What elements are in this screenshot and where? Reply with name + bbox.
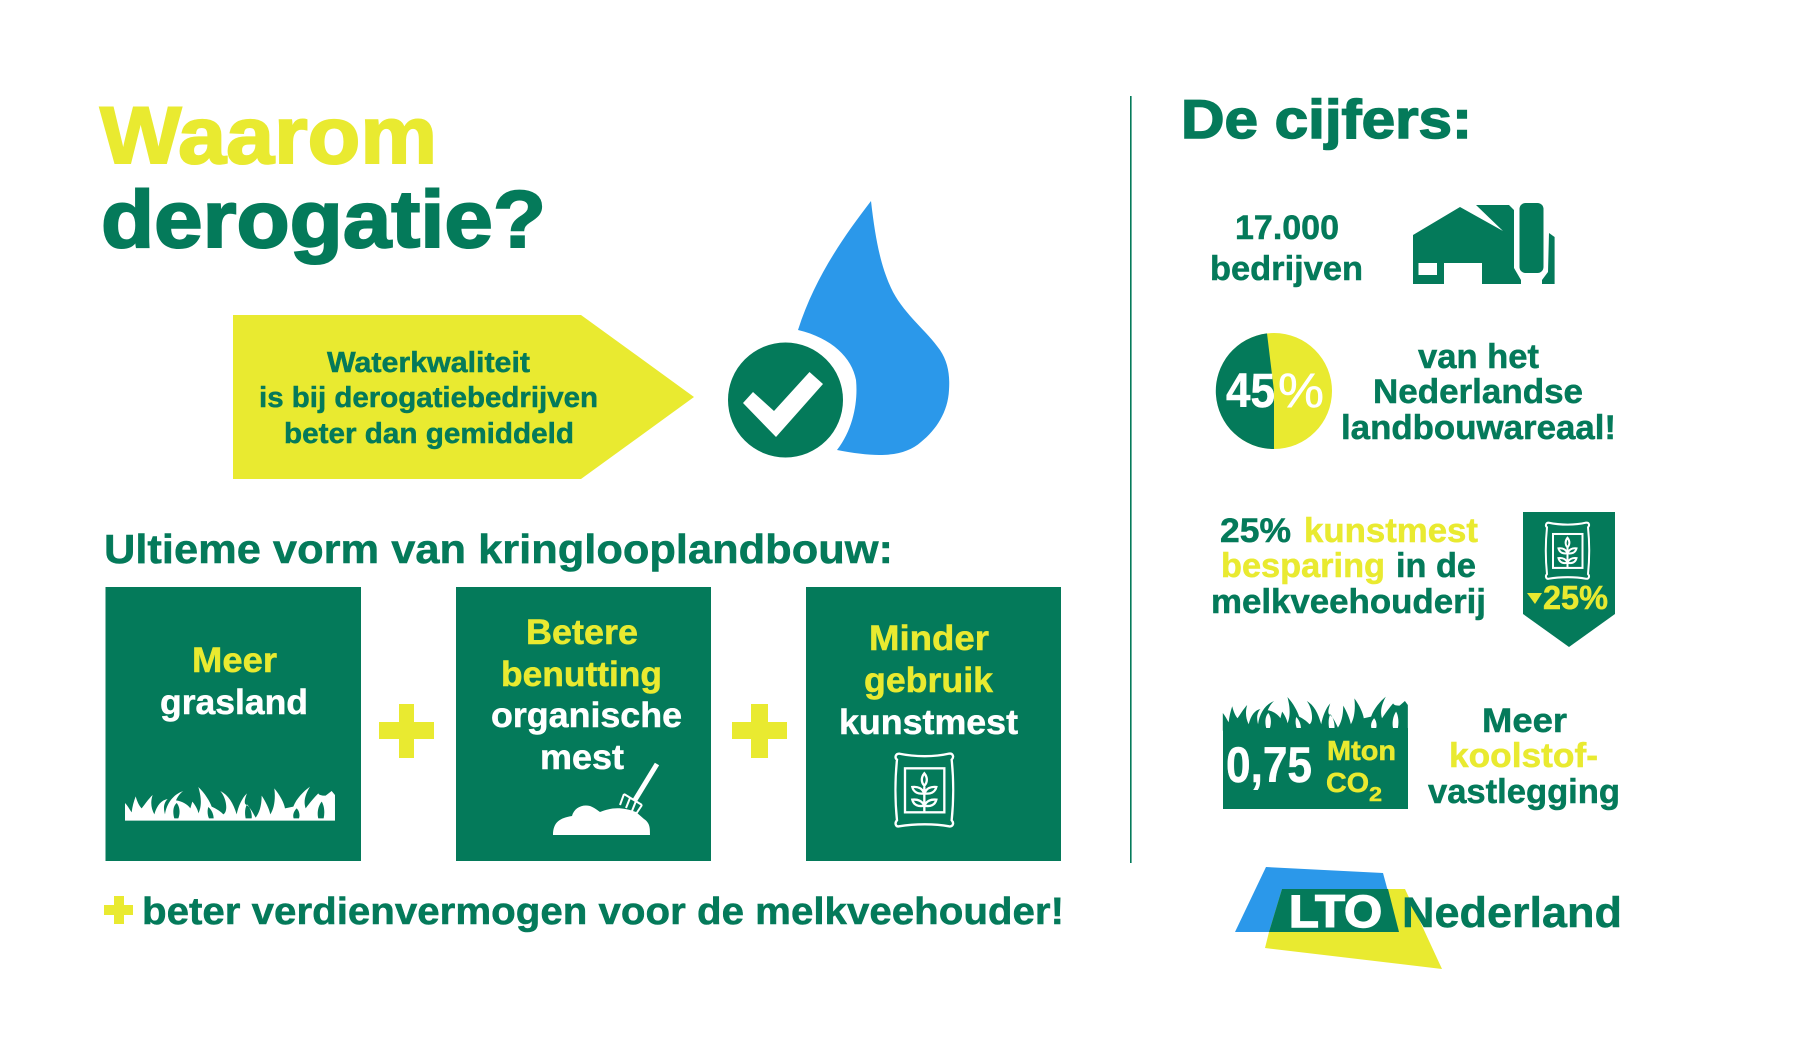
arrow callout: waterkwaliteit: is bij derogatiebedrijven xyxy=(259,382,598,414)
stat: 25% kunstmest: besparing xyxy=(1221,547,1385,585)
icon: manure pile with fork xyxy=(553,764,657,835)
panel: minder gebruik kunstmest: kunstmest xyxy=(839,703,1018,742)
logo: LTO Nederland: LTO xyxy=(1289,886,1382,937)
heading: kringlooplandbouw: Ultieme vorm van kringlooplandbouw: xyxy=(104,526,893,572)
icon: grass block with 0,75 Mton CO2: Mton xyxy=(1327,735,1396,766)
stat: 45% pie: van het xyxy=(1418,338,1539,376)
icon: grass block with 0,75 Mton CO2: 2 xyxy=(1369,784,1382,806)
stat: koolstofvastlegging xyxy=(1223,697,1620,811)
icon: water drop with check xyxy=(728,201,949,458)
stat: 45% pie xyxy=(1216,333,1616,449)
pie chart: % xyxy=(1278,365,1324,418)
panel: meer grasland: Meer xyxy=(192,641,277,680)
stat: 25% kunstmest: 25% xyxy=(1220,512,1291,550)
stat: koolstofvastlegging: Meer xyxy=(1482,702,1567,740)
panel: minder gebruik kunstmest: Minder xyxy=(869,619,989,658)
stat: 25% kunstmest: kunstmest xyxy=(1304,512,1478,550)
panel: meer grasland xyxy=(106,587,361,861)
panel: betere benutting organische mest: Betere xyxy=(526,613,638,652)
panel: betere benutting organische mest xyxy=(456,587,711,861)
icon: grass block with 0,75 Mton CO2: CO xyxy=(1326,767,1369,798)
title: Waarom xyxy=(100,91,437,181)
badge: minus 25%: 25% xyxy=(1543,579,1608,616)
arrow callout: waterkwaliteit: Waterkwaliteit xyxy=(327,347,530,379)
stat: 45% pie: Nederlandse xyxy=(1373,373,1583,411)
icon: fertilizer bag xyxy=(895,754,953,826)
arrow callout: waterkwaliteit xyxy=(233,315,694,479)
stat: 17.000 bedrijven xyxy=(1210,203,1555,288)
title: derogatie? xyxy=(101,175,546,265)
title xyxy=(100,91,546,265)
bottom line: verdienvermogen: beter verdienvermogen voor de melkveehouder! xyxy=(142,891,1064,933)
stat: 25% kunstmest: in de xyxy=(1396,547,1476,585)
panel: minder gebruik kunstmest: gebruik xyxy=(864,661,994,700)
panel: betere benutting organische mest: benutting xyxy=(501,655,662,694)
panel: betere benutting organische mest: organische xyxy=(491,696,682,735)
icon: grass block with 0,75 Mton CO2: 0,75 xyxy=(1226,737,1312,793)
stat: 17.000 bedrijven: bedrijven xyxy=(1210,250,1363,288)
icon: plus xyxy=(732,704,787,758)
icon: farm xyxy=(1413,203,1555,284)
icon: plus xyxy=(379,704,434,758)
stat: 17.000 bedrijven: 17.000 xyxy=(1235,209,1339,247)
panel: betere benutting organische mest: mest xyxy=(540,738,624,777)
pie chart: 45 xyxy=(1226,365,1275,418)
panel: meer grasland: grasland xyxy=(160,683,308,722)
heading: de cijfers: De cijfers: xyxy=(1181,88,1472,150)
stat: 25% kunstmest: melkveehouderij xyxy=(1211,583,1486,621)
divider xyxy=(1130,96,1132,863)
icon: grass xyxy=(125,787,335,821)
icon: grass block with 0,75 Mton CO2 xyxy=(1223,697,1408,809)
stat: koolstofvastlegging: vastlegging xyxy=(1428,773,1620,811)
arrow callout: waterkwaliteit: beter dan gemiddeld xyxy=(284,418,574,450)
panel: minder gebruik kunstmest xyxy=(806,587,1061,861)
logo: LTO Nederland: Nederland xyxy=(1402,889,1622,937)
badge: minus 25% xyxy=(1523,512,1615,647)
stat: koolstofvastlegging: koolstof- xyxy=(1449,737,1598,775)
logo: LTO Nederland xyxy=(1235,867,1622,969)
stat: 45% pie: landbouwareaal! xyxy=(1341,409,1616,447)
stat: 25% kunstmest xyxy=(1211,512,1615,647)
pie chart xyxy=(1216,333,1332,449)
